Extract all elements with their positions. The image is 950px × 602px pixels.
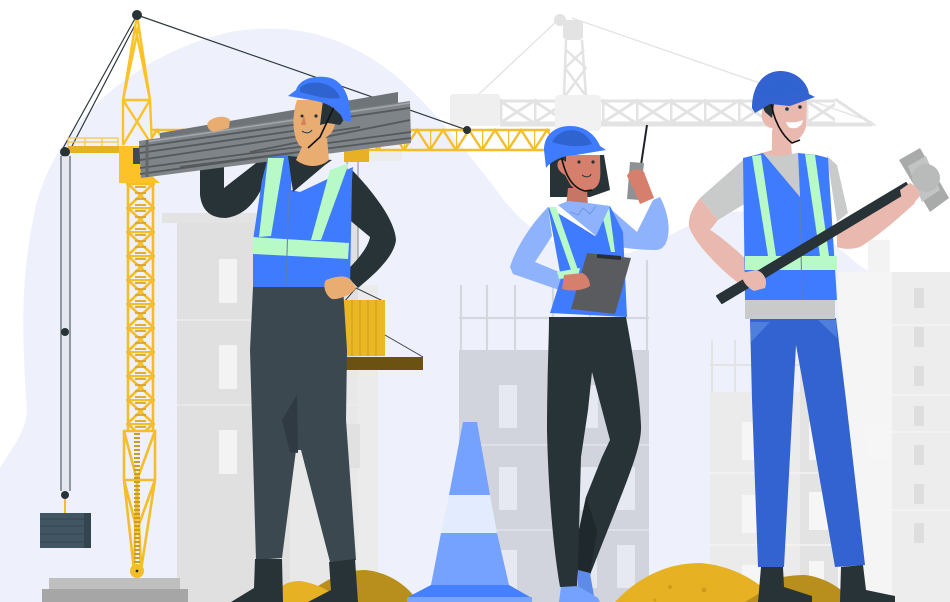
hand on hammer	[900, 183, 920, 205]
boots	[758, 565, 895, 602]
trousers	[750, 318, 865, 567]
left arm	[689, 198, 760, 284]
hand on hip	[324, 277, 356, 299]
neck	[762, 130, 800, 197]
worker: woman with clipboard and radio	[510, 125, 669, 602]
hammer handle	[717, 183, 910, 303]
shirt hem	[745, 298, 835, 319]
middle building with scaffold	[459, 260, 649, 602]
hard hat	[288, 77, 351, 122]
trousers	[547, 317, 641, 587]
head	[293, 100, 335, 148]
shirt neckline	[288, 156, 332, 192]
left building	[162, 213, 378, 602]
shirt sleeves	[700, 160, 746, 220]
background crane (ghost)	[450, 14, 872, 131]
trolley	[344, 148, 369, 162]
cables	[62, 15, 467, 150]
radio	[641, 125, 647, 165]
shirt collar	[558, 201, 610, 236]
clipboard	[571, 253, 631, 314]
traffic cone	[407, 422, 532, 602]
hard hat	[544, 126, 606, 168]
hard hat	[752, 71, 815, 113]
shoes	[578, 570, 594, 596]
left arm	[200, 160, 275, 218]
right arm	[606, 197, 669, 250]
hanging crate and pallet	[343, 162, 423, 370]
yellow tower crane	[40, 10, 550, 578]
left jib and railing	[68, 146, 120, 153]
vest	[743, 153, 837, 300]
head	[557, 155, 600, 191]
hand on plank	[207, 117, 230, 132]
vest	[548, 206, 627, 317]
hoist rope	[62, 156, 69, 491]
worker: man carrying planks	[139, 77, 411, 602]
hand on clipboard	[562, 273, 590, 290]
cab	[119, 146, 160, 183]
lower mast	[124, 431, 155, 570]
neck	[566, 188, 588, 207]
tower top	[123, 15, 152, 145]
hand on radio	[627, 169, 654, 204]
vest	[253, 155, 353, 287]
platform	[42, 578, 188, 602]
neck	[296, 138, 329, 166]
right arm	[344, 168, 396, 288]
mast	[126, 183, 155, 431]
right arm	[837, 190, 920, 249]
trousers	[250, 287, 356, 562]
sand mound left	[275, 570, 418, 602]
pulleys	[132, 10, 142, 20]
right buildings	[710, 240, 950, 602]
planks	[160, 92, 398, 172]
hanging load	[40, 513, 91, 548]
head	[762, 96, 807, 142]
hammer head	[899, 148, 949, 212]
sand mound right	[615, 563, 852, 602]
boots	[231, 559, 358, 602]
hand on handle	[741, 270, 766, 291]
hair	[550, 155, 610, 197]
left arm	[510, 207, 564, 291]
jib truss right	[152, 128, 550, 152]
worker: man with sledgehammer	[689, 71, 949, 602]
